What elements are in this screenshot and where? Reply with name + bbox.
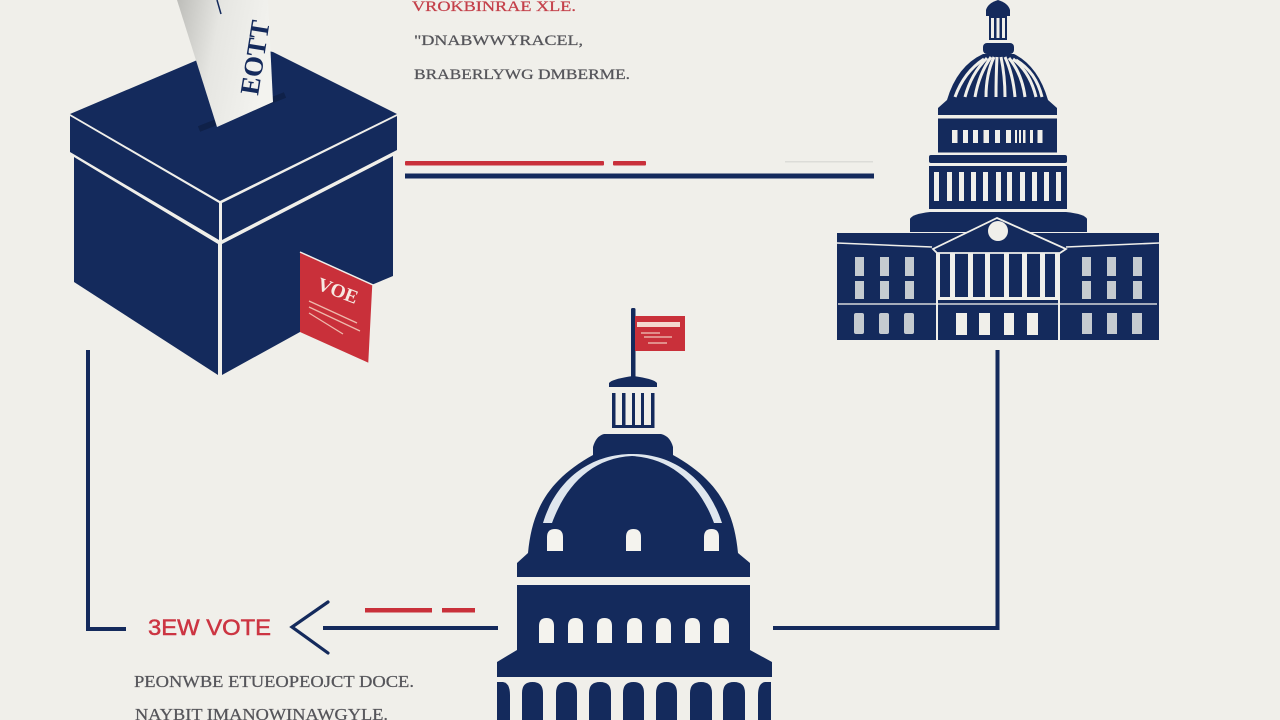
pediment — [933, 218, 1066, 253]
lantern — [609, 376, 657, 428]
dome — [517, 434, 750, 577]
connector: new vote back up to ballot box — [88, 350, 126, 629]
ballot paper — [177, 0, 276, 127]
box lid left face — [70, 116, 219, 240]
connector: capitol down to dome — [773, 350, 998, 628]
arrow: ballot box to capitol — [405, 161, 874, 178]
new vote label: 3EW VOTE — [148, 615, 271, 640]
top text block — [412, 0, 630, 83]
drum base — [910, 212, 1087, 232]
ballot slot — [199, 95, 285, 129]
icon: ballot box — [70, 0, 397, 375]
upper drum — [938, 118, 1057, 152]
ballot paper: EOTT — [234, 18, 276, 97]
box lid top face — [70, 44, 397, 201]
portico columns — [936, 252, 1060, 300]
lower colonnade — [497, 682, 771, 720]
colonnade drum — [929, 155, 1067, 209]
red voter card: VOE — [314, 274, 361, 309]
box body left face — [74, 157, 218, 375]
arrow: dome to new vote — [292, 602, 498, 653]
bottom text block — [134, 672, 414, 720]
lantern — [983, 0, 1014, 54]
flag — [631, 308, 685, 378]
text line two: "DNABWWYRACEL, — [414, 33, 583, 49]
box lid right face — [222, 116, 397, 240]
red voter card — [300, 252, 373, 363]
ribbed dome — [938, 54, 1057, 115]
building wings — [837, 233, 1159, 340]
icon: capitol building right — [837, 0, 1159, 340]
bottom text line one: PEONWBE ETUEOPEOJCT DOCE. — [134, 672, 414, 691]
dome drum with windows — [497, 585, 772, 677]
icon: domed statehouse bottom — [497, 308, 772, 720]
box body right face — [222, 156, 393, 375]
text line three: BRABERLYWG DMBERME. — [414, 67, 630, 83]
